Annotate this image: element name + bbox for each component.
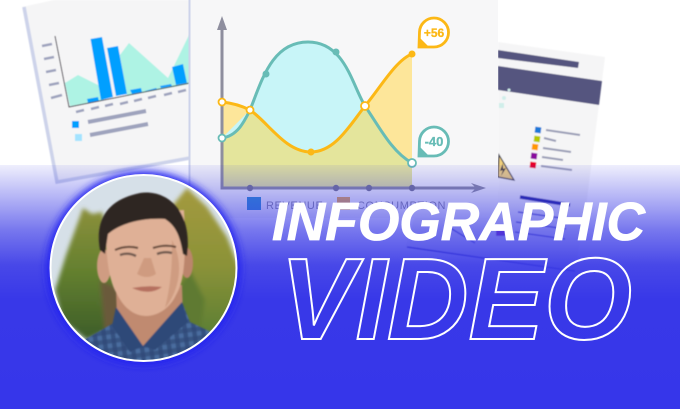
callout: +56: +56: [424, 26, 445, 40]
neck: [116, 285, 183, 346]
bar chart: [87, 37, 187, 103]
chart legend: [247, 197, 446, 212]
panel: main chart: [190, 0, 498, 218]
lower document lines: [407, 197, 575, 271]
line: teal series: [222, 42, 412, 163]
nose: [137, 258, 156, 277]
legend: colour keys: [530, 127, 580, 170]
title: VIDEO outline: VIDEO: [280, 234, 632, 364]
callout: -40: [418, 127, 448, 156]
eyes: [120, 252, 172, 256]
axis ticks: [42, 44, 186, 112]
glow around portrait: [46, 171, 240, 365]
blue gradient overlay: [0, 165, 680, 409]
icon: warning triangle: [498, 155, 514, 180]
callout: +56: [418, 18, 448, 47]
hair: [99, 193, 188, 256]
panel: right document: [405, 42, 605, 271]
legend: [72, 111, 148, 141]
cheek shade: [165, 240, 179, 308]
line: orange series: [222, 54, 412, 152]
collars: [112, 307, 143, 352]
brows: [115, 246, 176, 250]
chart areas: [222, 42, 412, 188]
trees: [55, 208, 120, 340]
panel: left document: [22, 0, 190, 184]
ears: [97, 249, 111, 283]
small teal marks: [499, 88, 510, 108]
axes: [217, 16, 486, 193]
area chart: mint: [65, 33, 190, 106]
chart legend: REVENUE: [266, 200, 323, 212]
shirt: [84, 304, 210, 360]
callout: -40: -40: [425, 134, 443, 149]
face: [106, 210, 185, 316]
chart legend: CONSUMPTION: [357, 200, 446, 212]
portrait photo: [50, 174, 240, 375]
axes: [55, 36, 190, 107]
mouth: [132, 286, 162, 292]
data points: [218, 48, 416, 191]
title: INFOGRAPHIC: INFOGRAPHIC: [272, 192, 646, 252]
